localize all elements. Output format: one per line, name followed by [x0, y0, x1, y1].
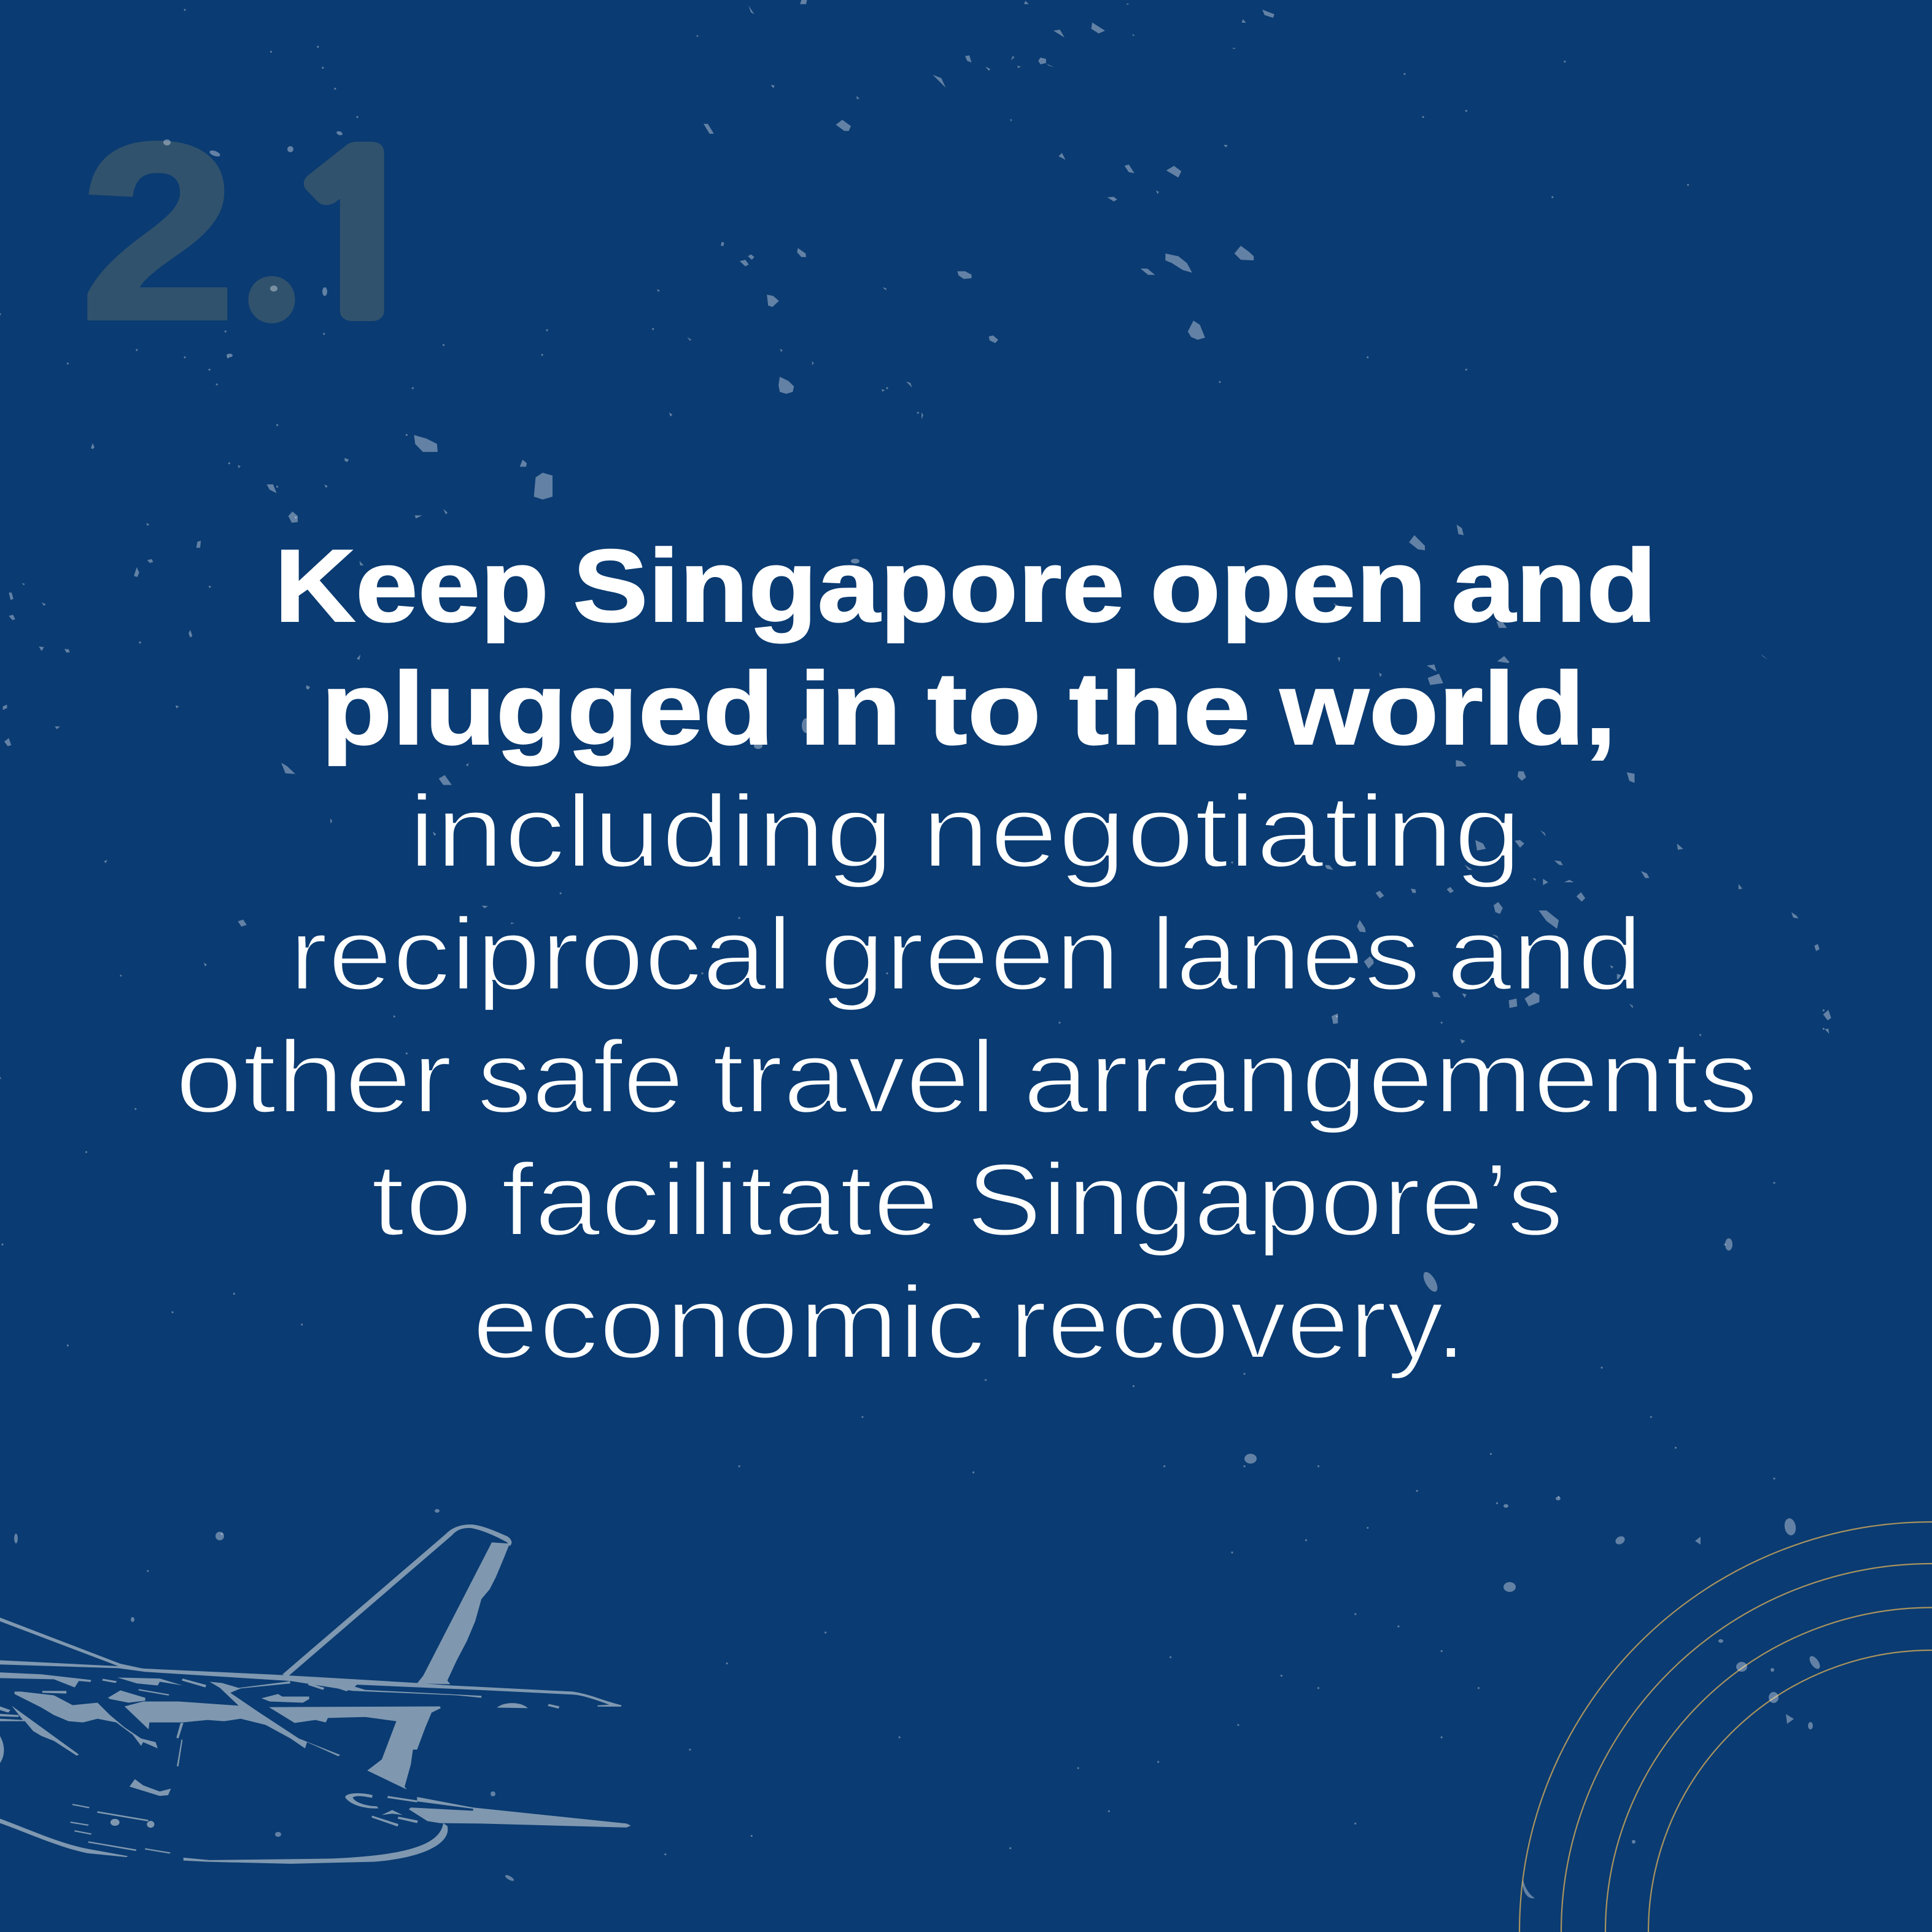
main statement text	[175, 528, 1758, 1380]
body lines: green	[820, 896, 1120, 1012]
bold heading line 1: Keep	[274, 528, 549, 643]
body lines: lanes	[1150, 896, 1421, 1012]
body lines: Singapore’s	[966, 1142, 1564, 1257]
bold heading line 2: plugged	[321, 651, 774, 766]
body lines: to	[371, 1142, 473, 1257]
body lines: and	[1446, 896, 1643, 1012]
body lines: economic	[472, 1265, 985, 1380]
bold heading line 2: in	[799, 651, 901, 766]
airplane line drawing	[0, 1524, 631, 1864]
bold heading line 1: Singapore	[573, 528, 1125, 643]
body lines	[175, 774, 1758, 1380]
bold heading line 2: to	[927, 651, 1041, 766]
section number 2.1	[80, 36, 433, 391]
body lines: safe	[477, 1019, 684, 1135]
section number 2.1: .	[230, 36, 313, 391]
section number 2.1: 2	[80, 92, 236, 371]
bold heading line 1: and	[1451, 528, 1657, 643]
body lines: including	[408, 774, 894, 889]
gold concentric arcs	[1519, 1522, 1932, 1932]
body lines: negotiating	[921, 774, 1522, 889]
body lines: arrangements	[1023, 1019, 1758, 1135]
body lines: reciprocal	[289, 896, 793, 1012]
body lines: recovery.	[1009, 1265, 1467, 1380]
bold heading line 2: world,	[1279, 651, 1616, 766]
body lines: facilitate	[501, 1142, 939, 1257]
bold heading line 2	[321, 651, 1616, 766]
bold heading line 2: the	[1069, 651, 1251, 766]
body lines: other	[175, 1019, 452, 1135]
bold heading line 1	[274, 528, 1657, 643]
body lines: travel	[712, 1019, 996, 1135]
section number 2.1: 1	[280, 131, 433, 346]
bold heading line 1: open	[1150, 528, 1427, 643]
